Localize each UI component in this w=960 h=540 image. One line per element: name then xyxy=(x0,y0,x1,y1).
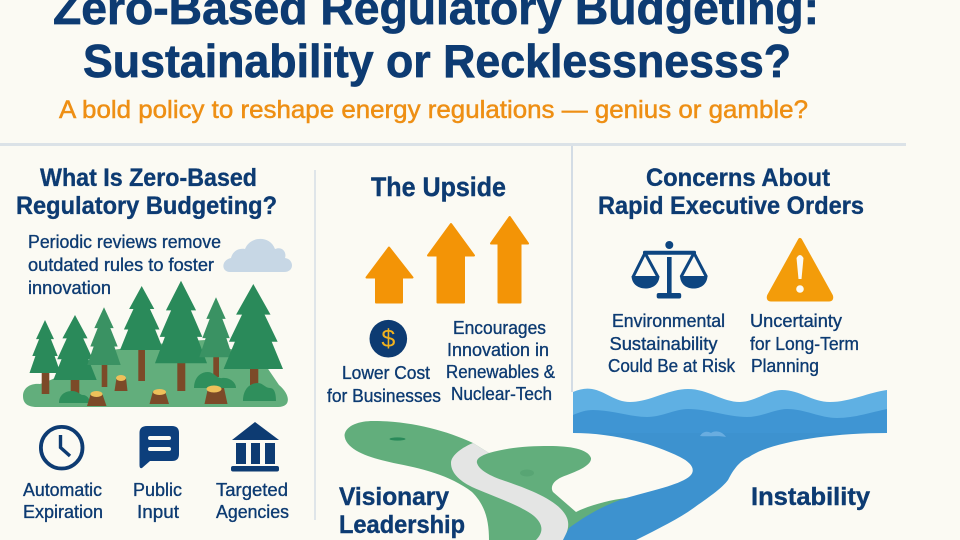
label: uncertainty xyxy=(750,311,859,376)
heading: concerns: Rapid Executive Orders xyxy=(598,192,864,220)
arrow: medium xyxy=(428,224,474,302)
tree trunks xyxy=(42,348,258,395)
label: visionary leadership: Leadership xyxy=(339,511,465,539)
label: public input: Input xyxy=(137,502,179,522)
title xyxy=(53,0,819,87)
stumps xyxy=(87,375,228,406)
sea light wave xyxy=(573,389,887,420)
heading: concerns: Concerns About xyxy=(646,164,831,192)
label: encourages innovation: Renewables & xyxy=(446,362,555,382)
text: periodic reviews: Periodic reviews remove xyxy=(28,232,221,252)
label: uncertainty: Uncertainty xyxy=(750,311,842,331)
sea dark wave xyxy=(573,409,887,433)
label: encourages innovation xyxy=(446,318,555,404)
label: encourages innovation: Nuclear-Tech xyxy=(451,384,552,404)
tree crowns xyxy=(30,281,283,380)
label: targeted agencies xyxy=(216,480,289,522)
label: uncertainty: Planning xyxy=(751,356,819,376)
label: targeted agencies: Targeted xyxy=(216,480,288,500)
illustration: forest with stumps xyxy=(23,281,288,407)
label: targeted agencies: Agencies xyxy=(216,502,289,522)
heading: what is: Regulatory Budgeting? xyxy=(16,192,277,220)
arrow: tall xyxy=(491,217,528,302)
label: instability: Instability xyxy=(751,483,870,511)
icon: warning triangle xyxy=(769,240,831,300)
label: environmental sustainability: Sustainability xyxy=(610,334,718,354)
label: uncertainty: for Long-Term xyxy=(750,334,859,354)
green land xyxy=(344,421,626,540)
heading: concerns xyxy=(598,164,864,220)
panel: concerns xyxy=(598,164,864,376)
label: public input: Public xyxy=(133,480,182,500)
text: periodic reviews: outdated rules to foster xyxy=(28,255,214,275)
label: environmental sustainability xyxy=(608,311,736,376)
gray road xyxy=(451,443,568,540)
icon: speech bubble xyxy=(140,426,179,468)
icon: cloud xyxy=(223,239,292,272)
panel: what is zero-based regulatory budgeting xyxy=(16,164,292,522)
ground xyxy=(23,340,288,407)
label: automatic expiration: Automatic xyxy=(23,480,102,500)
label: automatic expiration: Expiration xyxy=(23,502,103,522)
text: periodic reviews xyxy=(28,232,221,298)
text: periodic reviews: innovation xyxy=(28,278,111,298)
panel: the upside xyxy=(327,172,555,406)
icon: dollar coin: $ xyxy=(381,325,395,353)
bushes xyxy=(59,372,276,403)
heading: what is: What Is Zero-Based xyxy=(40,164,257,192)
title: Sustainability or Recklessnesss? xyxy=(83,35,791,87)
subtitle: A bold policy to reshape energy regulations — genius or gamble? xyxy=(59,96,808,124)
rising arrows xyxy=(366,217,528,302)
label: visionary leadership xyxy=(339,483,465,539)
icon: scales xyxy=(632,241,708,298)
label: environmental sustainability: Could Be at Risk xyxy=(608,356,736,376)
illustration: diverging path and river xyxy=(344,389,887,540)
label: automatic expiration xyxy=(23,480,103,522)
icon: clock xyxy=(41,427,82,469)
label: encourages innovation: Encourages xyxy=(453,318,546,338)
arrow: small xyxy=(366,248,412,302)
label: lower cost xyxy=(327,363,441,406)
heading: the upside: The Upside xyxy=(371,172,506,202)
blue river xyxy=(563,415,887,540)
label: environmental sustainability: Environmental xyxy=(612,311,725,331)
icon: dollar coin xyxy=(370,320,407,358)
label: public input xyxy=(133,480,182,522)
label: lower cost: for Businesses xyxy=(327,386,441,406)
label: visionary leadership: Visionary xyxy=(339,483,449,511)
label: lower cost: Lower Cost xyxy=(342,363,430,383)
icon: government building xyxy=(231,422,279,472)
label: encourages innovation: Innovation in xyxy=(447,340,549,360)
heading: what is xyxy=(16,164,277,220)
